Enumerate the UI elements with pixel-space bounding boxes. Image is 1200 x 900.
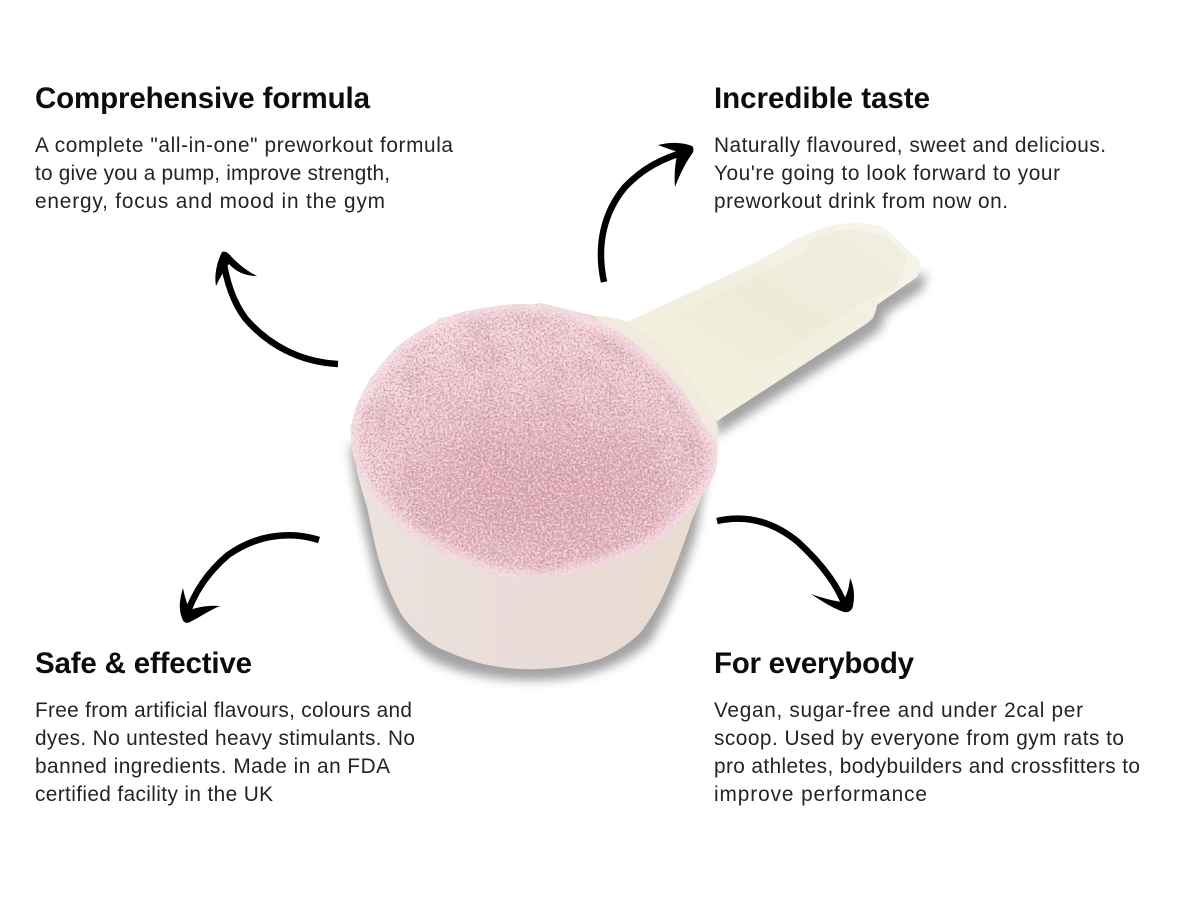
panel: incredible taste: [714, 82, 1106, 213]
text block: for everybody description: [714, 699, 1140, 806]
cup rim beside handle: [595, 316, 718, 450]
text block: incredible taste description: preworkout drink from now on.: [714, 190, 1008, 213]
scoop shadow: [350, 272, 926, 680]
arrow: to for everybody: [717, 519, 854, 612]
handle inner hollow: [643, 230, 907, 390]
cup body: [340, 295, 730, 675]
text block: comprehensive formula description: A complete "all-in-one" preworkout formula: [35, 134, 453, 157]
text block: for everybody description: improve performance: [714, 783, 927, 806]
scoop of pink powder: [340, 223, 926, 680]
text block: for everybody description: pro athletes, bodybuilders and crossfitters to: [714, 755, 1140, 778]
powder surface: [350, 304, 718, 578]
heading: safe and effective: Safe & effective: [35, 647, 252, 680]
arrow: to comprehensive formula: [215, 252, 338, 364]
text block: safe and effective description: dyes. No untested heavy stimulants. No: [35, 727, 415, 750]
arrow: to incredible taste: [601, 143, 694, 282]
text block: incredible taste description: [714, 134, 1106, 213]
panel: comprehensive formula: [35, 82, 453, 213]
text block: incredible taste description: Naturally flavoured, sweet and delicious.: [714, 134, 1106, 157]
text block: safe and effective description: Free from artificial flavours, colours and: [35, 699, 412, 722]
heading: for everybody: For everybody: [714, 647, 915, 680]
text block: comprehensive formula description: to give you a pump, improve strength,: [35, 162, 390, 185]
text block: safe and effective description: certified facility in the UK: [35, 783, 273, 806]
panel: safe and effective: [35, 647, 415, 806]
text block: safe and effective description: [35, 699, 415, 806]
text block: for everybody description: scoop. Used by everyone from gym rats to: [714, 727, 1124, 750]
infographic: [35, 86, 1140, 806]
heading: comprehensive formula: Comprehensive formula: [35, 82, 371, 115]
text block: comprehensive formula description: [35, 134, 453, 213]
text block: comprehensive formula description: energy, focus and mood in the gym: [35, 190, 385, 213]
scoop handle: [615, 223, 920, 421]
panel: for everybody: [714, 647, 1140, 806]
arrow: to safe and effective: [180, 535, 319, 623]
heading: incredible taste: Incredible taste: [714, 82, 930, 115]
text block: safe and effective description: banned ingredients. Made in an FDA: [35, 755, 390, 778]
text block: for everybody description: Vegan, sugar-free and under 2cal per: [714, 699, 1083, 722]
text block: incredible taste description: You're going to look forward to your: [714, 162, 1060, 185]
